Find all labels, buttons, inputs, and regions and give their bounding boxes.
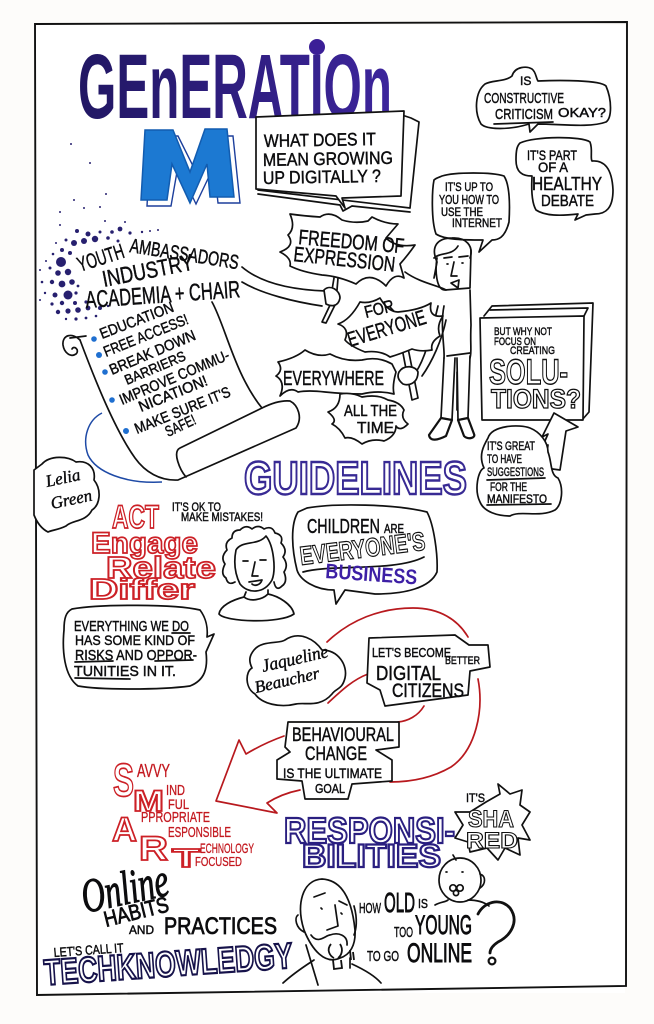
big letter M bbox=[141, 129, 240, 206]
burst: freedom of expression: FREEDOM OF bbox=[298, 226, 405, 258]
burst: it's shared: SHA bbox=[468, 806, 514, 833]
smart acronym: A bbox=[112, 811, 137, 849]
smart acronym: T bbox=[172, 843, 200, 873]
bubble: children everyone's business: EVERYONE'S bbox=[298, 526, 427, 571]
bubble: up to you: INTERNET bbox=[452, 216, 503, 230]
scroll: EDUCATION bbox=[97, 299, 176, 343]
book: solutions: CREATING bbox=[510, 345, 555, 357]
note: mistakes bbox=[172, 500, 263, 524]
bubble: suggestions manifesto bbox=[477, 426, 562, 516]
bubble: risks and opportunities: RISKS AND OPPOR- bbox=[75, 647, 197, 664]
box: behavioural change: IS THE ULTIMATE bbox=[283, 765, 382, 781]
scroll: NICATION! bbox=[136, 373, 210, 416]
bubble: healthy debate: OF A bbox=[538, 159, 569, 175]
box: behavioural change bbox=[277, 722, 399, 799]
book: solutions: FOCUS ON bbox=[494, 336, 536, 348]
act engage relate differ: Relate bbox=[106, 550, 216, 585]
act engage relate differ: Differ bbox=[89, 574, 195, 606]
burst: everywhere: EVERYWHERE bbox=[283, 368, 384, 390]
text: online habits and practices bbox=[76, 854, 277, 940]
question book banner bbox=[256, 111, 419, 212]
bubble: constructive criticism: OKAY? bbox=[558, 105, 606, 120]
bubble: up to you: USE THE bbox=[441, 205, 483, 219]
bubble: children everyone's business: BUSINESS bbox=[325, 560, 418, 589]
smart acronym: S bbox=[113, 754, 134, 806]
arrow up from suggestion bbox=[541, 413, 578, 470]
big question mark bbox=[478, 902, 514, 964]
scroll: MAKE SURE IT'S bbox=[132, 384, 233, 438]
smart acronym: AVVY bbox=[137, 761, 170, 781]
question: how old is too young: OLD bbox=[384, 887, 415, 918]
book: solutions bbox=[480, 303, 593, 420]
bubble: up to you bbox=[432, 173, 509, 252]
smart acronym: FUL bbox=[168, 796, 189, 812]
bubble: up to you: IT'S UP TO bbox=[445, 180, 493, 194]
question: how old is too young: IS bbox=[418, 896, 428, 911]
book: solutions: TIONS? bbox=[491, 384, 581, 414]
bubble: constructive criticism bbox=[476, 67, 610, 132]
cloud: Lelia Green: Lelia bbox=[43, 465, 82, 491]
heading: responsibilities: BILITIES bbox=[302, 838, 441, 874]
question: how old is too young bbox=[359, 887, 472, 968]
woman portrait bbox=[219, 526, 294, 621]
title: GEnERATIOn bbox=[78, 36, 392, 138]
question: how old is too young: ONLINE bbox=[407, 938, 472, 968]
dot cloud bbox=[39, 143, 159, 321]
bubble: children everyone's business: ARE bbox=[384, 521, 404, 536]
text: let's call it techknowledgy: LET'S CALL IT bbox=[53, 940, 124, 960]
book: solutions: BUT WHY NOT bbox=[494, 326, 552, 338]
bubble: constructive criticism: CONSTRUCTIVE bbox=[484, 90, 564, 107]
scroll: BREAK DOWN bbox=[107, 327, 198, 379]
heading: responsibilities: RESPONSI- bbox=[284, 810, 455, 851]
question: how old is too young: YOUNG bbox=[415, 910, 472, 940]
text: online habits and practices: Online bbox=[76, 854, 173, 924]
smart acronym: PPROPRIATE bbox=[141, 809, 210, 826]
heading: responsibilities bbox=[284, 810, 455, 874]
baby bbox=[435, 855, 489, 906]
bubble: healthy debate: IT'S PART bbox=[527, 147, 577, 163]
bubble: healthy debate: HEALTHY bbox=[532, 174, 602, 194]
burst: all the time: TIME bbox=[357, 420, 394, 437]
man holding signs bbox=[242, 238, 474, 440]
burst: for everyone: EVERYONE bbox=[345, 306, 429, 352]
box: digital citizens: DIGITAL bbox=[376, 663, 441, 685]
text: online habits and practices: PRACTICES bbox=[164, 913, 277, 940]
act engage relate differ bbox=[89, 499, 216, 606]
text: let's call it techknowledgy: TECHKNOWLEDGY bbox=[43, 935, 294, 993]
cloud: Lelia Green: Green bbox=[49, 486, 94, 513]
smart acronym: IND bbox=[166, 782, 185, 799]
bubble: up to you: YOU HOW TO bbox=[439, 192, 499, 207]
question: how old is too young: HOW bbox=[359, 900, 381, 917]
burst: all the time bbox=[328, 393, 408, 444]
burst: all the time: ALL THE bbox=[344, 403, 397, 420]
scroll bbox=[63, 299, 299, 482]
smart acronym: ECHNOLOGY bbox=[200, 840, 254, 856]
question: how old is too young: TOO bbox=[394, 924, 413, 941]
burst: freedom of expression: EXPRESSION bbox=[292, 243, 396, 277]
burst: freedom of expression bbox=[280, 214, 415, 286]
scroll: BARRIERS bbox=[122, 348, 188, 388]
red connector lines bbox=[327, 608, 480, 782]
box: digital citizens: LET'S BECOME bbox=[372, 645, 451, 660]
text: online habits and practices: HABITS bbox=[101, 892, 171, 932]
scroll: SAFE! bbox=[163, 412, 199, 441]
burst: for everyone: FOR bbox=[362, 296, 396, 322]
scroll: IMPROVE COMMU- bbox=[117, 347, 232, 409]
box: behavioural change: BEHAVIOURAL bbox=[292, 725, 394, 746]
scroll: FREE ACCESS! bbox=[101, 311, 191, 361]
bubble: suggestions manifesto: IT'S GREAT bbox=[487, 439, 535, 453]
smart acronym: FOCUSED bbox=[195, 854, 242, 869]
heading: guidelines: GUIDELINES bbox=[244, 452, 467, 504]
bald man bbox=[283, 879, 381, 985]
red arrow bbox=[216, 736, 300, 813]
bubble: suggestions manifesto: FOR THE bbox=[490, 480, 527, 494]
bubble: risks and opportunities: EVERYTHING WE DO bbox=[74, 618, 189, 635]
smart acronym bbox=[112, 754, 254, 873]
burst: it's shared bbox=[455, 784, 530, 860]
act engage relate differ: Engage bbox=[91, 527, 198, 560]
bubble: risks and opportunities bbox=[63, 605, 214, 689]
smart acronym: M bbox=[133, 785, 164, 818]
box: digital citizens: BETTER bbox=[445, 655, 480, 667]
question book banner: MEAN GROWING bbox=[263, 148, 393, 170]
note: mistakes: MAKE MISTAKES! bbox=[181, 510, 263, 524]
question book banner: WHAT DOES IT bbox=[264, 129, 376, 151]
question book banner: UP DIGITALLY ? bbox=[263, 166, 381, 188]
bubble: risks and opportunities: HAS SOME KIND OF bbox=[75, 632, 195, 648]
text: let's call it techknowledgy bbox=[43, 935, 294, 993]
box: digital citizens bbox=[367, 635, 490, 706]
smart acronym: R bbox=[139, 830, 168, 868]
book: solutions: SOLU- bbox=[489, 353, 568, 392]
text: participants: ACADEMIA + CHAIR bbox=[85, 276, 241, 314]
bubble: risks and opportunities: TUNITIES IN IT. bbox=[74, 663, 176, 680]
cloud: Jaqueline Beauchert bbox=[247, 636, 346, 706]
bubble: children everyone's business bbox=[293, 505, 437, 604]
bubble: constructive criticism: IS bbox=[520, 74, 531, 88]
box: behavioural change: CHANGE bbox=[305, 744, 367, 765]
box: digital citizens: CITIZENS bbox=[392, 681, 464, 702]
text: participants bbox=[74, 235, 241, 314]
bubble: suggestions manifesto: SUGGESTIONS bbox=[487, 465, 544, 479]
smart acronym: ESPONSIBLE bbox=[168, 824, 231, 841]
bubble: children everyone's business: CHILDREN bbox=[307, 516, 380, 538]
cloud: Jaqueline Beauchert: Jaqueline bbox=[259, 641, 330, 676]
text: participants: INDUSTRY bbox=[100, 249, 195, 292]
bubble: healthy debate bbox=[516, 138, 613, 220]
question: how old is too young: TO GO bbox=[367, 948, 399, 965]
act engage relate differ: ACT bbox=[112, 499, 159, 535]
text: participants: AMBASSADORS bbox=[128, 235, 240, 274]
text: participants: YOUTH bbox=[74, 240, 127, 277]
burst: it's shared: RED bbox=[466, 828, 518, 853]
cloud: Jaqueline Beauchert: Beaucher bbox=[253, 663, 322, 697]
bubble: suggestions manifesto: TO HAVE bbox=[487, 452, 522, 466]
burst: it's shared: IT'S bbox=[466, 791, 485, 805]
cloud: Lelia Green bbox=[34, 457, 99, 532]
bubble: constructive criticism: CRITICISM bbox=[495, 106, 553, 123]
bubble: suggestions manifesto: MANIFESTO bbox=[487, 492, 547, 506]
text: online habits and practices: AND bbox=[129, 923, 154, 937]
box: behavioural change: GOAL bbox=[315, 781, 345, 796]
note: mistakes: IT'S OK TO bbox=[172, 500, 221, 514]
burst: everywhere bbox=[276, 350, 396, 396]
bubble: healthy debate: DEBATE bbox=[541, 193, 594, 210]
title bbox=[78, 36, 392, 138]
